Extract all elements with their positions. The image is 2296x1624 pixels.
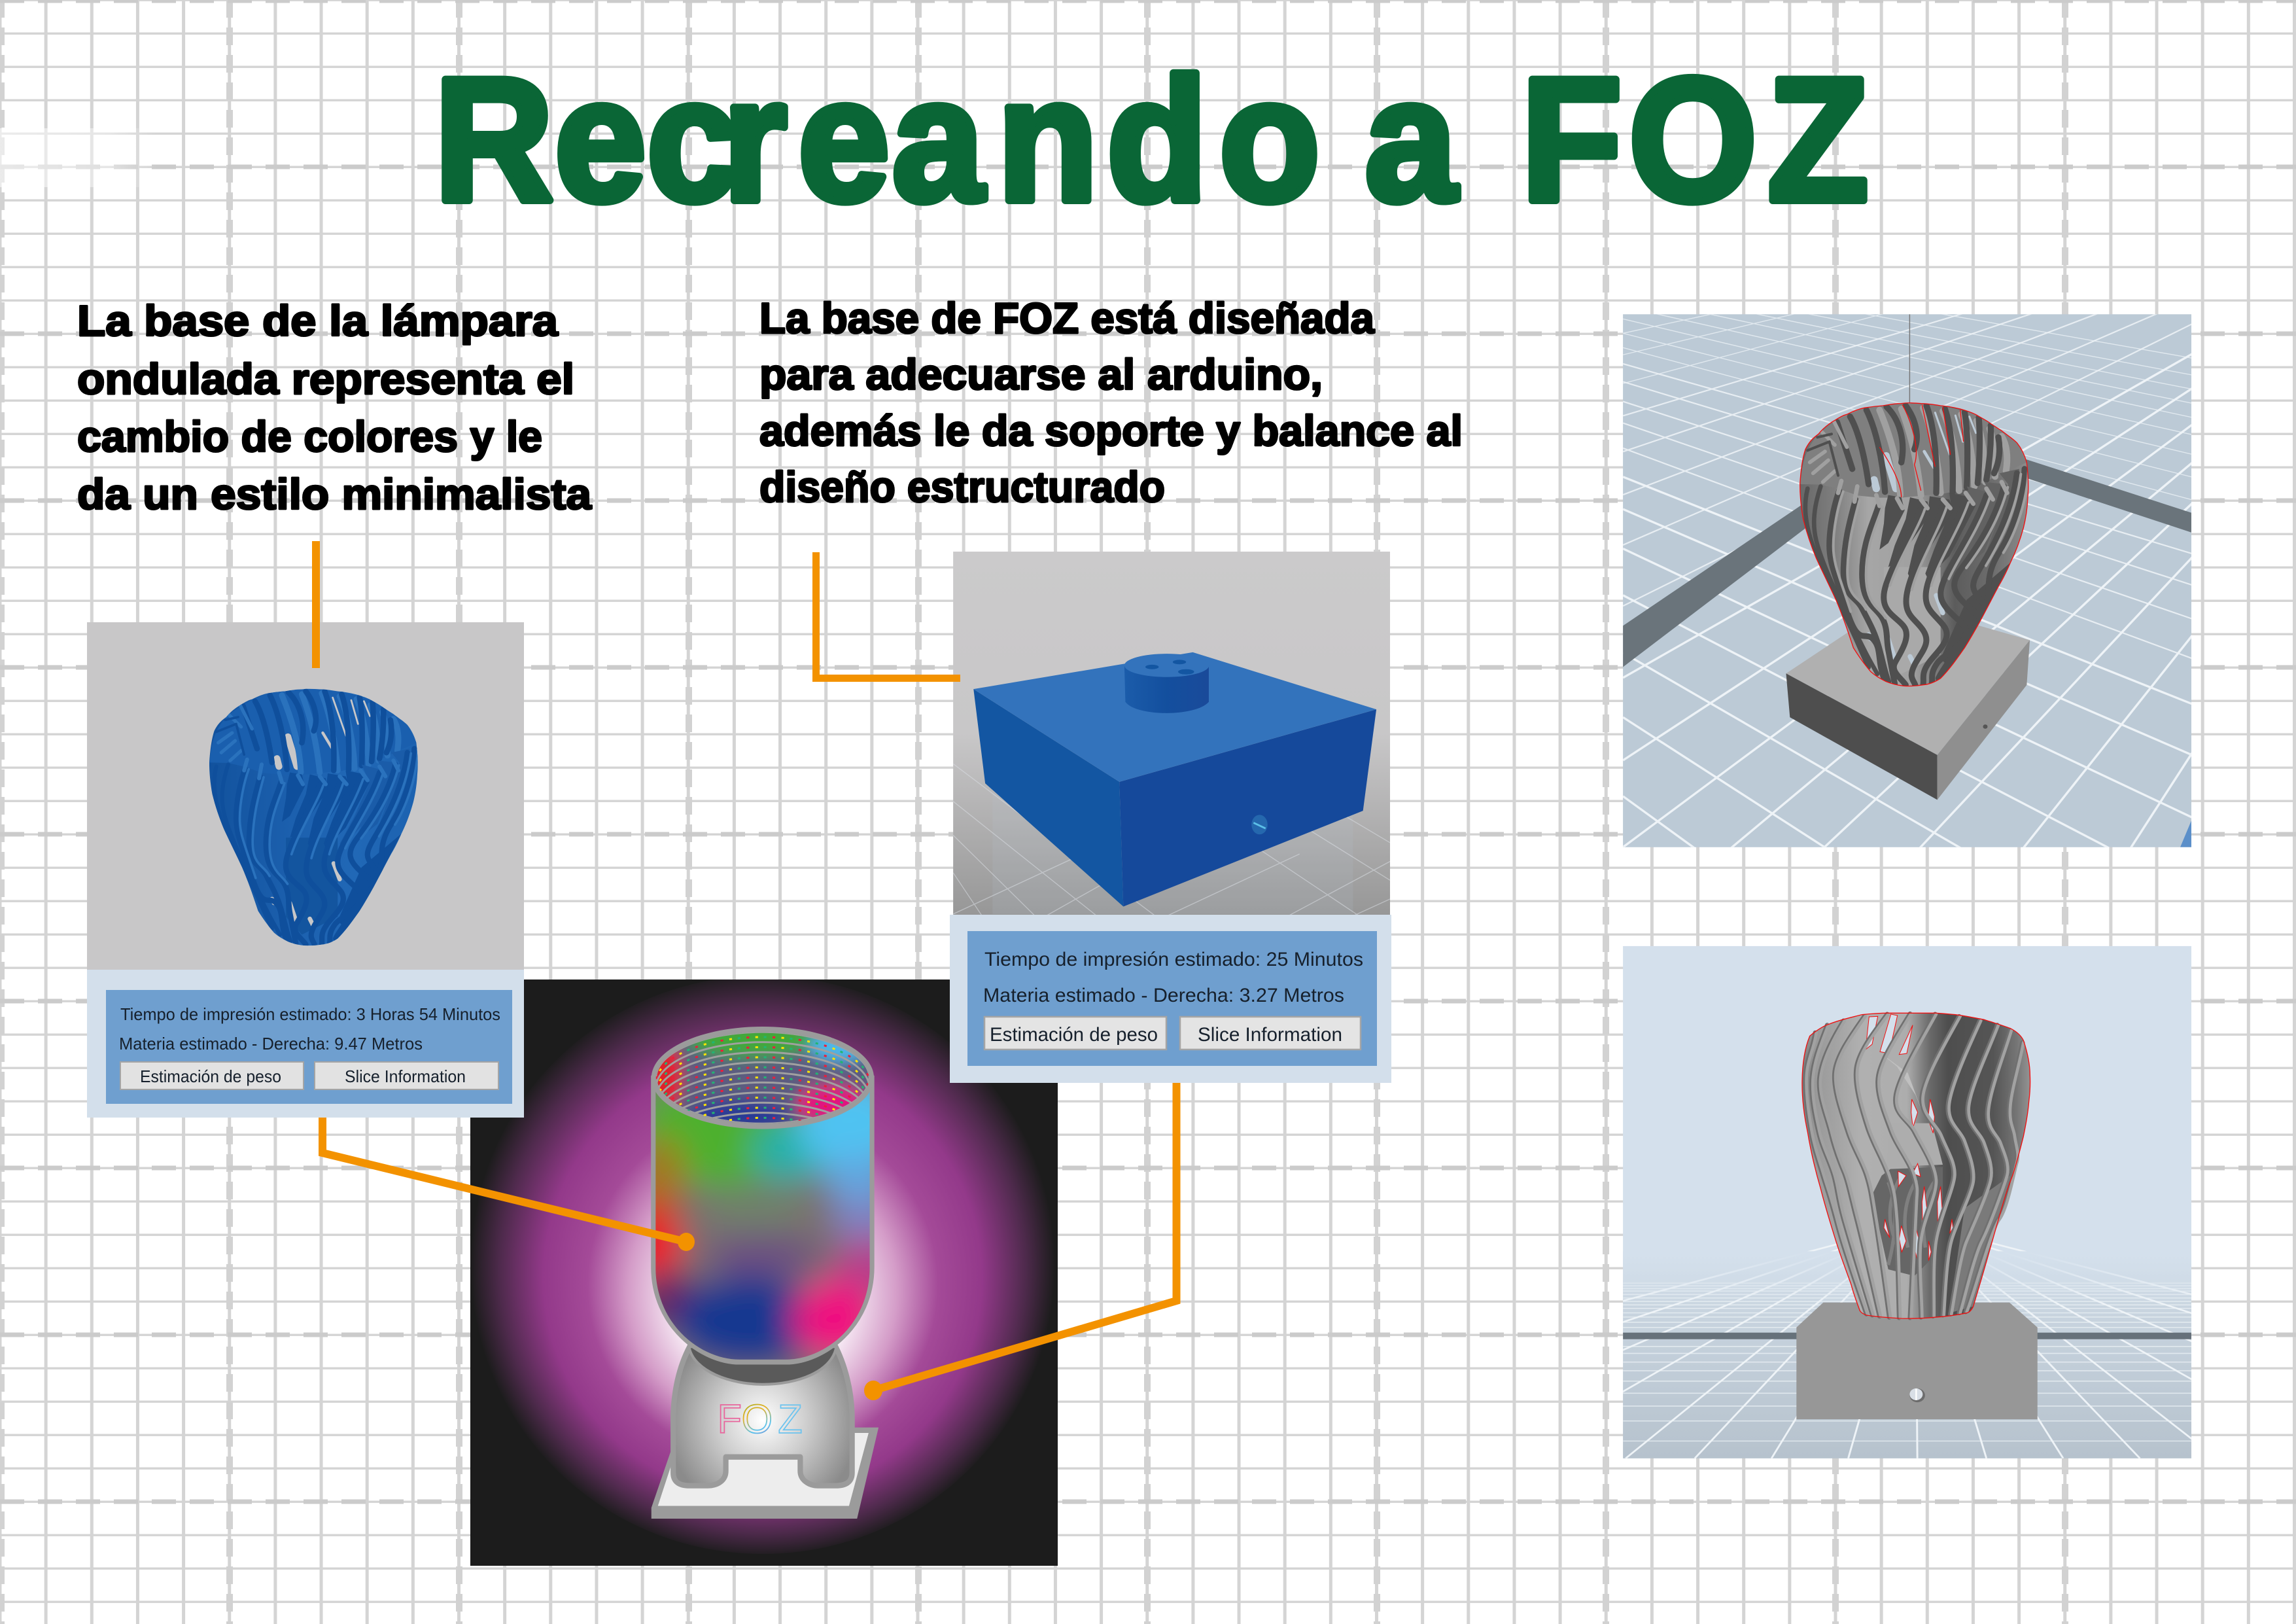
- slicer floor: [1027, 946, 2296, 1458]
- viewport: [87, 622, 524, 970]
- print info box: Tiempo de impresión estimado: 3 Horas 54 Minutos: [120, 1004, 500, 1024]
- inner cavity: [1871, 1167, 1943, 1276]
- magenta glow: [470, 976, 1055, 1554]
- shadow side of ribbons: [1805, 1014, 2023, 1318]
- arrow: middle text to blue base: [816, 552, 960, 678]
- colour-changing cup: [651, 1076, 875, 1365]
- lamp stand: [673, 1343, 852, 1486]
- base plate: [652, 1428, 878, 1519]
- print info box: Slice Information: [1198, 1024, 1342, 1046]
- panel: glowing lamp illustration: [470, 976, 1058, 1566]
- text block: middle description: para adecuarse al arduino,: [759, 350, 1323, 398]
- FOZ lamp drawing: [651, 1027, 878, 1519]
- arrow: lamp panel to cup: [322, 1118, 695, 1251]
- panel: blue lamp model: [87, 622, 524, 1118]
- lower right shaded faces: [1949, 1176, 2010, 1313]
- grey box base: [1786, 617, 2030, 800]
- print info box: Estimación de peso: [140, 1067, 281, 1086]
- cup interior with led rings: [652, 1027, 874, 1129]
- title: Recreando a FOZ: [434, 43, 1868, 238]
- text block: middle description: La base de FOZ está diseñada: [759, 294, 1375, 342]
- grey box base: [1796, 1303, 2038, 1419]
- print info box: [87, 970, 524, 1118]
- lamp outline: [1802, 1013, 2030, 1318]
- print info box: Slice Information: [345, 1067, 466, 1086]
- print info box: Estimación de peso: [990, 1024, 1158, 1046]
- blue corner: [2180, 821, 2191, 847]
- axis band: [1623, 1333, 2191, 1339]
- print info box: Tiempo de impresión estimado: 25 Minutos: [984, 949, 1363, 970]
- panel: front slicer view: [1623, 946, 2191, 1458]
- text block: left description: La base de la lámpara: [77, 296, 559, 345]
- see-through holes: [1866, 1014, 1953, 1262]
- text block: middle description: además le da soporte y balance al: [759, 406, 1463, 455]
- print info box: Materia estimado - Derecha: 3.27 Metros: [983, 985, 1344, 1006]
- illustration background: [470, 980, 1058, 1566]
- arrow: left text to blue lamp: [312, 541, 320, 668]
- panel: blue base model: [950, 552, 1391, 1083]
- stand neck: [689, 1347, 837, 1385]
- text block: left description: ondulada representa el: [77, 355, 574, 403]
- viewport: [953, 552, 1390, 936]
- panel: perspective slicer view: [1623, 314, 2191, 847]
- blue ondulated lamp: [202, 679, 429, 953]
- slicer floor: [1623, 314, 2191, 847]
- lit side of ribbons: [1807, 1014, 2023, 1318]
- arrow: base panel to stand: [864, 1083, 1176, 1400]
- axis bands: [1623, 459, 2191, 667]
- text block: left description: da un estilo minimalista: [77, 470, 592, 518]
- print info box: Materia estimado - Derecha: 9.47 Metros: [119, 1034, 423, 1053]
- text block: left description: cambio de colores y le: [77, 412, 542, 461]
- print info box: [950, 915, 1391, 1083]
- FOZ logo: FOZ: [718, 1397, 803, 1442]
- text block: left description: [77, 296, 592, 518]
- grey lamp: [1792, 393, 2041, 694]
- back crossing strands: [1888, 1176, 1934, 1265]
- text block: middle description: [759, 294, 1463, 511]
- grey lamp front view: [1802, 1013, 2030, 1318]
- probe line: [1909, 314, 1910, 403]
- text block: middle description: diseño estructurado: [759, 463, 1165, 511]
- blue box: [973, 652, 1376, 906]
